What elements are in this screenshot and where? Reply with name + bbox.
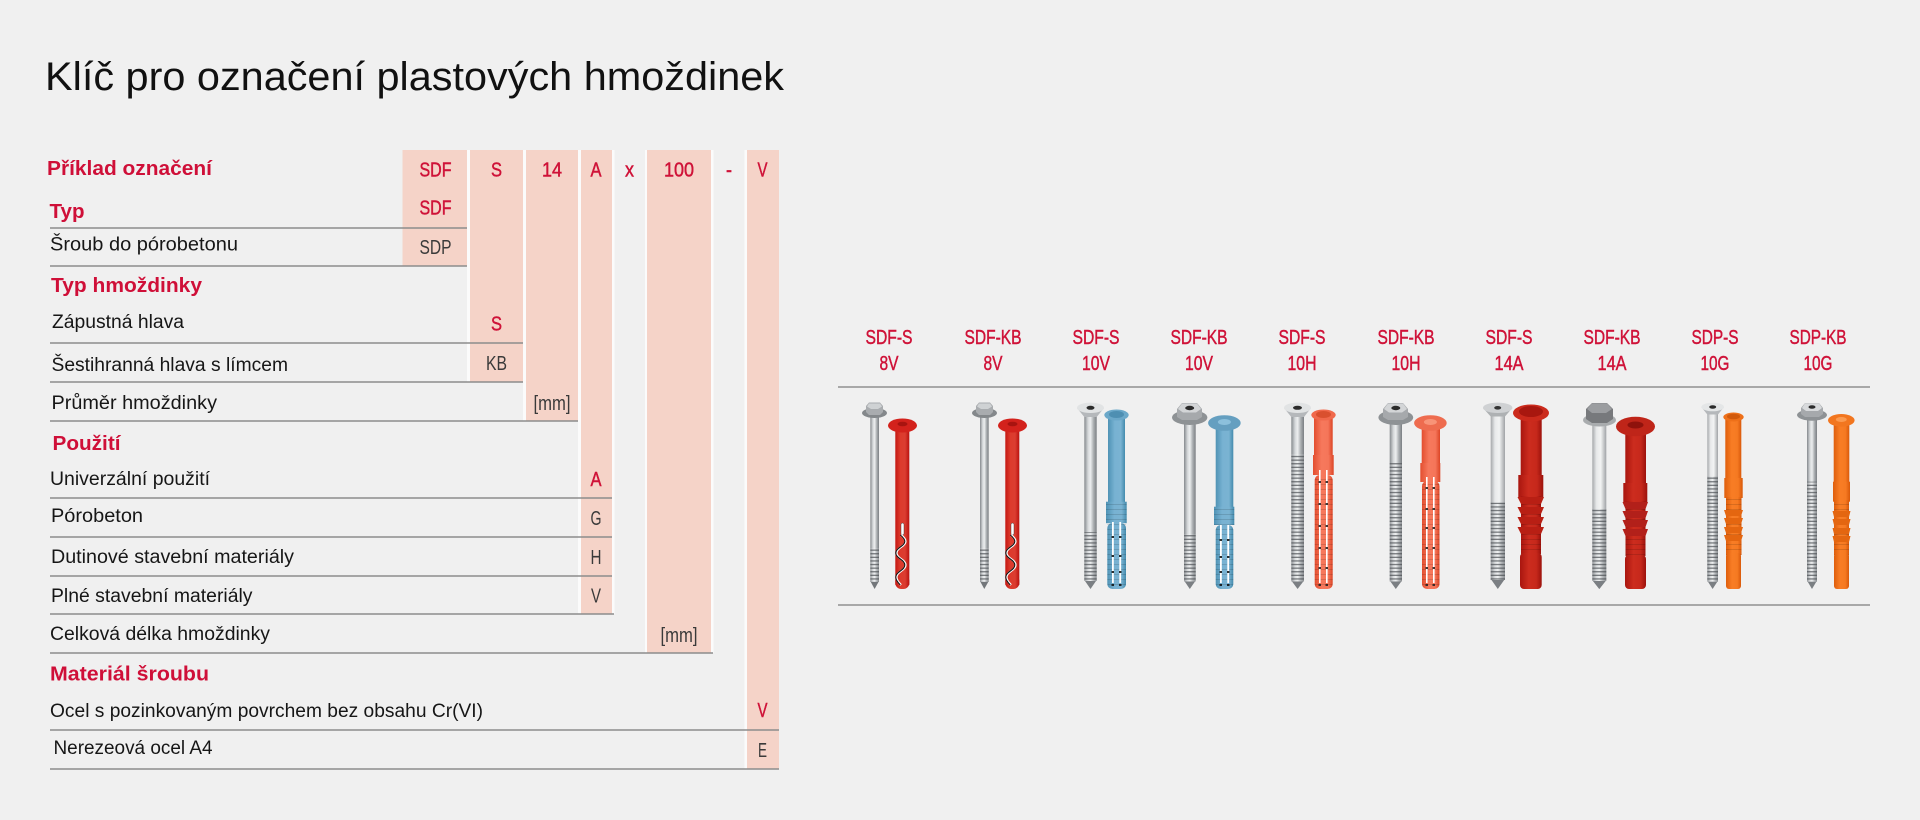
dowel: [1828, 414, 1855, 589]
section: screw material: Ocel s pozinkovaným povrchem bez obsahu Cr(VI): [50, 701, 483, 722]
row: total dowel length: [50, 624, 698, 647]
example code: [420, 160, 768, 182]
product: SDP-S 10G: SDP-S: [1692, 327, 1738, 349]
heading: example designation: [47, 158, 768, 182]
product: SDF-S 8V: [862, 327, 917, 589]
product: SDF-KB 10V: 10V: [1185, 353, 1214, 375]
screw: [1701, 403, 1724, 589]
section: type: SDF: [420, 198, 452, 220]
product range rules: [838, 387, 1870, 605]
product: SDF-KB 10V: SDF-KB: [1170, 327, 1228, 349]
example code: 14: [542, 160, 562, 182]
section: use: Dutinové stavební materiály: [51, 547, 295, 568]
product: SDF-KB 14A: SDF-KB: [1584, 327, 1640, 349]
product: SDF-S 10V: SDF-S: [1072, 327, 1120, 349]
heading: example designation: Příklad označení: [47, 158, 213, 180]
screw: [1378, 403, 1413, 589]
product: SDF-S 8V: 8V: [880, 353, 899, 375]
section: dowel type: Šestihranná hlava s límcem: [52, 354, 288, 376]
product: SDF-KB 10H: [1378, 327, 1447, 589]
product: SDF-S 10H: 10H: [1288, 353, 1316, 375]
section: dowel type: KB: [486, 353, 507, 375]
product: SDF-S 14A: [1483, 327, 1549, 589]
section: use: H: [590, 547, 602, 569]
example code: A: [590, 160, 602, 182]
screw: [1583, 403, 1616, 589]
dowel: [1723, 412, 1744, 589]
product: SDP-KB 10G: SDP-KB: [1790, 327, 1846, 349]
row: dowel diameter: [mm]: [534, 393, 570, 415]
section: dowel type: S: [491, 314, 502, 336]
product: SDF-KB 10V: [1170, 327, 1241, 589]
section: use: A: [590, 469, 602, 491]
section: screw material: V: [758, 700, 768, 722]
dowel: [1311, 410, 1336, 589]
example code: x: [625, 160, 634, 182]
product: SDF-S 14A: 14A: [1494, 353, 1524, 375]
product: SDF-S 10H: SDF-S: [1278, 327, 1326, 349]
screw: [972, 402, 997, 589]
panel: product range: [838, 327, 1870, 605]
product: SDF-S 14A: SDF-S: [1486, 327, 1532, 349]
section: screw material: Materiál šroubu: [50, 664, 209, 686]
dowel: [1513, 404, 1549, 589]
section: dowel type: Typ hmoždinky: [51, 275, 203, 297]
panel: designation key table: [47, 150, 779, 769]
example code: V: [758, 160, 768, 182]
product: SDP-S 10G: 10G: [1700, 353, 1730, 375]
product: SDF-KB 8V: [964, 327, 1027, 589]
section: screw material: Nerezeová ocel A4: [54, 738, 213, 759]
section: type: Šroub do pórobetonu: [50, 234, 238, 256]
example code: -: [726, 160, 732, 182]
section: screw material: E: [758, 740, 767, 762]
section: use: Použití: [52, 433, 122, 455]
section: screw material: [50, 664, 768, 762]
product: SDF-KB 14A: [1583, 327, 1655, 589]
screw: [1797, 403, 1827, 589]
row rules: [50, 228, 779, 769]
dowel: [998, 418, 1027, 589]
product: SDF-S 10V: 10V: [1082, 353, 1111, 375]
section: use: Pórobeton: [51, 506, 143, 527]
product: SDF-KB 10H: 10H: [1392, 353, 1420, 375]
product: SDF-S 10V: [1072, 327, 1129, 589]
row: dowel diameter: Průměr hmoždinky: [52, 393, 218, 414]
product: SDF-KB 8V: SDF-KB: [964, 327, 1022, 349]
product: SDF-KB 10H: SDF-KB: [1378, 327, 1434, 349]
screw: [1284, 403, 1311, 589]
screw: [1483, 403, 1512, 589]
section: use: Univerzální použití: [50, 469, 211, 490]
section: use: V: [591, 586, 601, 608]
product: SDF-KB 14A: 14A: [1598, 353, 1627, 375]
section: type: SDP: [420, 237, 452, 259]
row: total dowel length: Celková délka hmoždinky: [50, 624, 270, 645]
section: type: [50, 198, 452, 259]
example code: 100: [664, 160, 694, 182]
product: SDF-S 10H: [1278, 327, 1336, 589]
product: SDP-KB 10G: 10G: [1804, 353, 1832, 375]
section: use: Plné stavební materiály: [51, 586, 253, 607]
dowel: [1104, 410, 1129, 589]
code columns: [402, 150, 779, 769]
product: SDP-KB 10G: [1790, 327, 1855, 589]
section: dowel type: Zápustná hlava: [52, 312, 184, 333]
screw: [1077, 403, 1104, 589]
title: Klíč pro označení plastových hmoždinek: [45, 55, 785, 99]
product: SDF-S 8V: SDF-S: [866, 327, 912, 349]
row: total dowel length: [mm]: [660, 625, 698, 647]
screw: [862, 402, 887, 589]
section: type: Typ: [50, 201, 84, 223]
section: use: G: [590, 508, 602, 530]
example code: S: [491, 160, 502, 182]
row: dowel diameter: [52, 393, 570, 415]
product: SDF-KB 8V: 8V: [984, 353, 1003, 375]
dowel: [1414, 415, 1447, 589]
dowel: [1208, 415, 1241, 589]
product: SDP-S 10G: [1692, 327, 1744, 589]
example code: SDF: [420, 160, 452, 182]
dowel: [888, 418, 917, 589]
section: dowel type: [51, 275, 507, 376]
dowel: [1616, 417, 1655, 589]
section: use: [50, 433, 602, 608]
screw: [1172, 403, 1207, 589]
